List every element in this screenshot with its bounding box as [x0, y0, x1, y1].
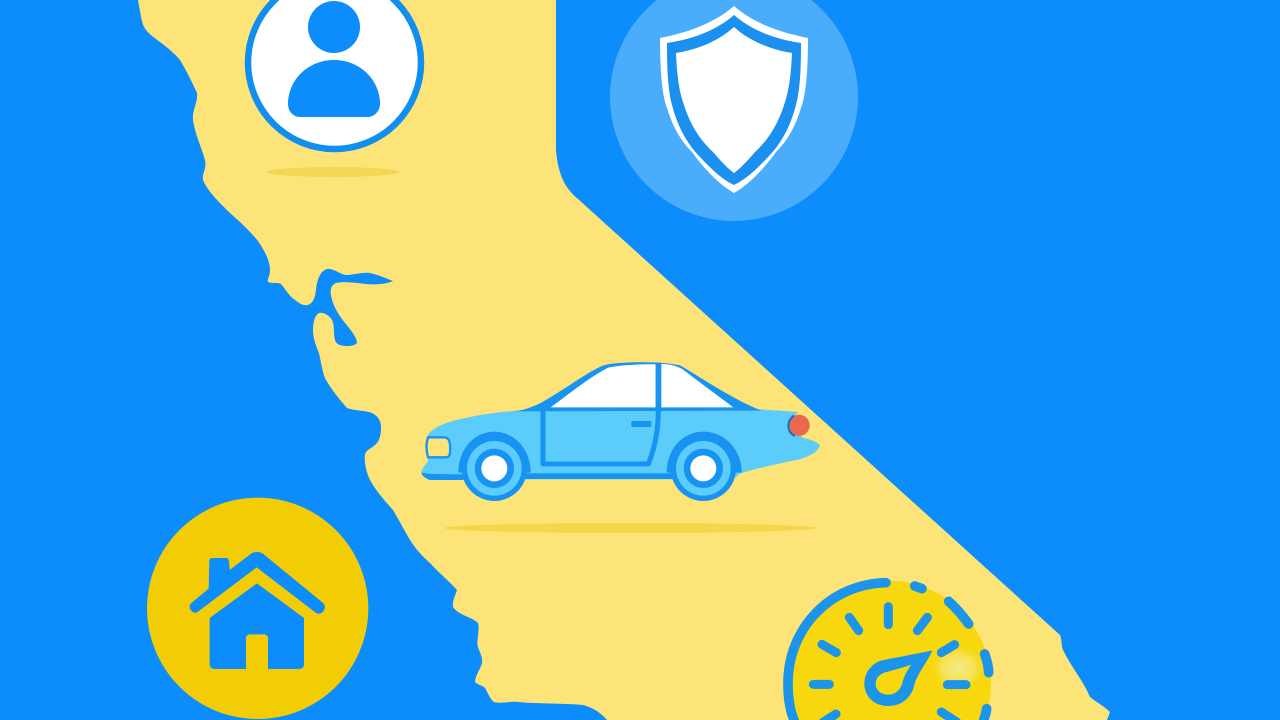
icon: speedometer gauge — [786, 581, 991, 720]
door — [543, 410, 658, 464]
front wheel — [458, 432, 531, 501]
windows — [551, 364, 656, 407]
icon: shield badge — [610, 0, 858, 221]
tick marks — [813, 607, 966, 720]
icon: house badge — [147, 498, 368, 719]
needle — [865, 651, 931, 705]
dial highlight — [930, 645, 987, 692]
window pillar — [650, 363, 666, 411]
rocker — [421, 473, 463, 480]
roof — [190, 552, 325, 614]
house body with door — [210, 583, 304, 669]
headlight — [426, 437, 450, 457]
door handle — [631, 421, 651, 427]
tail light — [788, 415, 810, 436]
icon: person badge — [248, 0, 421, 149]
car shadow — [444, 523, 816, 533]
person shadow — [267, 167, 399, 177]
car body — [421, 409, 820, 479]
rear wheel — [667, 432, 742, 501]
outer ring — [788, 583, 989, 720]
gauge dial — [786, 581, 991, 720]
roof — [515, 362, 762, 411]
map: California — [138, 0, 1110, 720]
icon: car — [421, 362, 820, 501]
